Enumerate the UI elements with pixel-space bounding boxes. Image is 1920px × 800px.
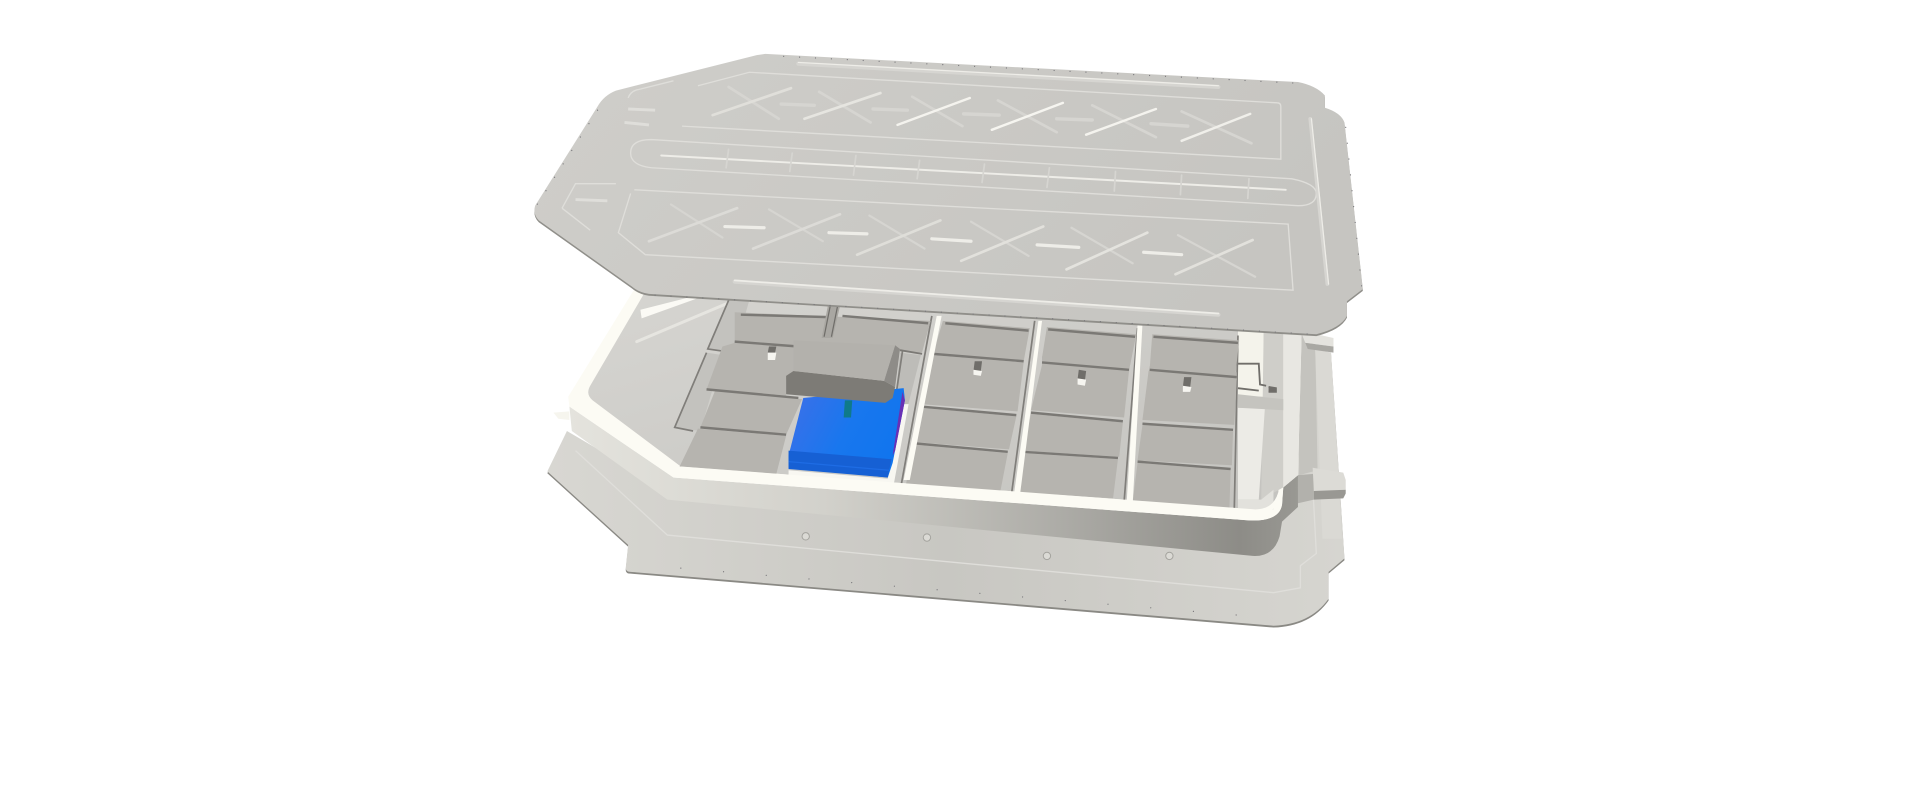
- teal slot on blue module: [844, 400, 852, 418]
- side wall highlights: [637, 296, 732, 342]
- column 1 and 2 joint frame: [822, 306, 840, 338]
- cross strap: [1238, 394, 1283, 410]
- column 1 tab: [768, 347, 776, 353]
- front rim strip: [676, 467, 1282, 516]
- lower tab stem: [1298, 474, 1314, 503]
- lower recessed panel: [618, 190, 1293, 290]
- column 4 battery modules: [1015, 327, 1136, 498]
- right rim stripes: [1283, 333, 1302, 487]
- floating module front face: [786, 340, 900, 403]
- module carrier frames: [675, 298, 1238, 509]
- tray base flange: [547, 349, 1344, 628]
- column 5 battery modules: [1133, 334, 1239, 509]
- column 1 and 2 battery modules: [680, 306, 931, 474]
- cover fastener dots: [536, 56, 1362, 334]
- small cream edge behind tray: [553, 411, 569, 420]
- top cover plate: [534, 54, 1363, 336]
- middle racetrack channel: [631, 140, 1316, 206]
- top long slot: [798, 62, 1218, 87]
- upper X stiffener row: [713, 87, 1251, 143]
- tray cavity floor: [588, 291, 1283, 509]
- blue module top face: [789, 388, 905, 478]
- lower X stiffener row: [649, 204, 1255, 277]
- lower tab: [1313, 468, 1346, 491]
- left corner marks: [562, 81, 673, 230]
- right side tabs: [1298, 331, 1346, 503]
- blue module front face: [789, 451, 891, 478]
- blue module purple side: [893, 392, 905, 456]
- bottom long slot: [735, 280, 1218, 315]
- column 3 battery modules: [906, 321, 1030, 491]
- right vertical slot: [1310, 119, 1329, 284]
- upper recessed panel: [682, 72, 1281, 159]
- blue highlighted battery module: [789, 388, 909, 484]
- tray rim: [568, 285, 1302, 520]
- blue module pale support below: [789, 404, 909, 484]
- right side base stripes: [1298, 333, 1342, 539]
- centre stiffener rib with ticks: [661, 149, 1286, 198]
- white divider strips between columns: [904, 316, 1142, 504]
- flange fastener dots: [681, 568, 1276, 618]
- mounting bolts: [802, 533, 1173, 560]
- bracket on right of tray: [1238, 364, 1276, 392]
- lower tab side: [1314, 490, 1346, 500]
- tray outer wall: [569, 407, 1298, 556]
- right bay panels: [1238, 331, 1283, 509]
- upper tab: [1300, 331, 1333, 347]
